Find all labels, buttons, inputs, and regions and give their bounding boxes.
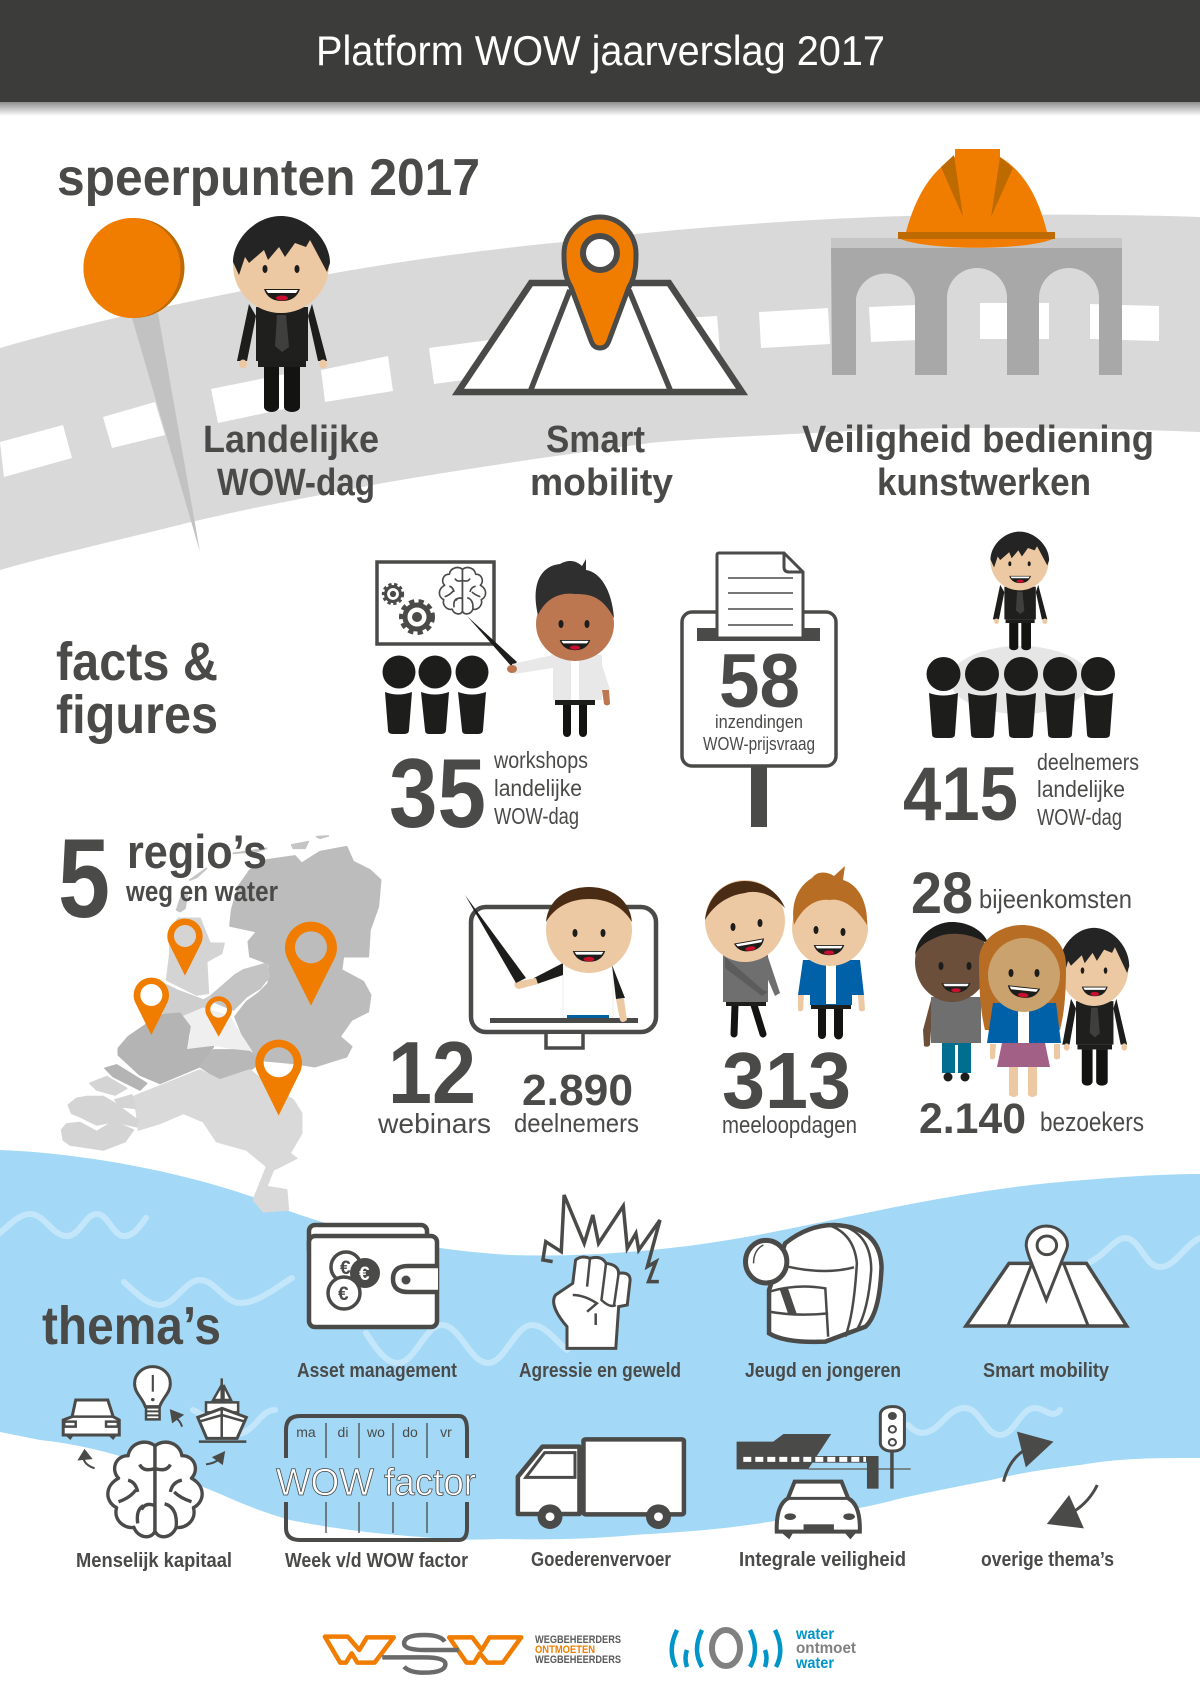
stat: 28 bijeenkomsten: bijeenkomsten — [979, 884, 1132, 914]
stat: 2.890 deelnemers: deelnemers — [514, 1108, 639, 1138]
stat: 2.890 deelnemers — [514, 1066, 639, 1138]
document — [717, 553, 803, 638]
icon: WOW factor week calendar — [276, 1416, 476, 1540]
heading: facts & figures: facts & — [56, 632, 218, 692]
presenter — [507, 559, 614, 737]
labels: bottom row themes — [76, 1549, 1114, 1572]
waves — [0, 1214, 1200, 1435]
labels: top row themes — [297, 1360, 1110, 1382]
woman in blue jacket — [979, 925, 1066, 1097]
illustration: webinar presenter in monitor — [465, 887, 656, 1048]
person in blue — [792, 866, 868, 1040]
icon: WOW factor week calendar: di — [338, 1424, 348, 1440]
label: Smart mobility: Smart — [546, 419, 645, 461]
stat: 35 workshops: 35 — [389, 738, 486, 848]
icon: WOW factor week calendar: ma — [296, 1424, 316, 1440]
illustration: two people walking along — [705, 866, 868, 1040]
stat: 5 regio's weg en water: regio’s — [127, 825, 267, 878]
stat: 5 regio's weg en water: 5 — [58, 816, 110, 941]
stat: 415 deelnemers: landelijke — [1037, 776, 1125, 802]
logo: wegbeheerders ontmoeten wegbeheerders — [325, 1634, 621, 1673]
stat: 28 bijeenkomsten: 28 — [911, 861, 973, 926]
audience — [926, 657, 1115, 738]
logo: water ontmoet water: water — [795, 1655, 834, 1672]
arrows — [79, 1411, 224, 1468]
label: Smart mobility: mobility — [530, 462, 673, 504]
stat: 2.140 bezoekers: bezoekers — [1040, 1107, 1144, 1137]
illustration: group of three visitors — [915, 922, 1129, 1097]
labels: bottom row themes: Menselijk kapitaal — [76, 1550, 232, 1572]
car — [63, 1400, 119, 1440]
stat: 35 workshops: WOW-dag — [494, 803, 579, 829]
stat: 313 meeloopdagen: 313 — [722, 1036, 851, 1125]
icon: map with orange pin — [458, 217, 742, 392]
map pins — [134, 919, 337, 1116]
stat: 28 bijeenkomsten — [911, 861, 1132, 926]
icon: wallet with euro coins: € — [338, 1284, 349, 1305]
stat: 35 workshops: workshops — [493, 747, 588, 773]
icon: wallet with euro coins: € — [359, 1264, 370, 1285]
icon: WOW factor week calendar: do — [402, 1424, 418, 1440]
labels: bottom row themes: Week v/d WOW factor — [285, 1550, 468, 1572]
label: Veiligheid bediening kunstwerken — [802, 419, 1154, 504]
stat: 35 workshops: landelijke — [494, 775, 582, 801]
icon: wallet with euro coins — [309, 1225, 438, 1327]
logo: wegbeheerders ontmoeten wegbeheerders: WEGBEHEERDERS — [535, 1634, 621, 1646]
man in suit — [1059, 928, 1129, 1086]
icon: WOW factor week calendar: vr — [440, 1424, 452, 1440]
icon: WOW factor week calendar: WOW factor — [276, 1462, 476, 1504]
title: Platform WOW jaarverslag 2017 — [316, 27, 885, 74]
label: Landelijke WOW-dag: Landelijke — [203, 419, 379, 461]
labels: top row themes: Jeugd en jongeren — [745, 1360, 901, 1382]
labels: bottom row themes: overige thema’s — [981, 1549, 1114, 1571]
illustration: speaker above audience — [926, 532, 1115, 738]
stat: 35 workshops — [389, 738, 588, 848]
water band — [0, 1150, 1200, 1540]
ship — [198, 1378, 246, 1442]
logo: water ontmoet water: water — [795, 1626, 834, 1643]
label: Veiligheid bediening kunstwerken: kunstwerken — [877, 462, 1091, 504]
logo: wegbeheerders ontmoeten wegbeheerders: ONTMOETEN — [535, 1644, 595, 1656]
icon: two curved arrows — [1004, 1432, 1097, 1528]
stat: 415 deelnemers: 415 — [903, 752, 1018, 837]
person: Landelijke WOW-dag — [233, 216, 330, 412]
header bar — [0, 0, 1200, 116]
label: Veiligheid bediening kunstwerken: Veiligheid bediening — [802, 419, 1154, 461]
stat: 5 regio's weg en water: weg en water — [125, 876, 278, 908]
labels: bottom row themes: Goederenvervoer — [531, 1549, 671, 1571]
icon: level crossing with car — [737, 1407, 911, 1539]
stat: 12 webinars: 12 — [388, 1023, 476, 1122]
logo: water ontmoet water — [672, 1626, 857, 1672]
heading: thema's: thema’s — [42, 1296, 221, 1356]
heading: facts & figures: figures — [56, 685, 218, 745]
stat: 313 meeloopdagen: meeloopdagen — [722, 1112, 857, 1139]
audience — [382, 656, 488, 734]
stat: 415 deelnemers — [903, 749, 1139, 837]
label: Landelijke WOW-dag — [203, 419, 379, 504]
stat: 2.140 bezoekers: 2.140 — [919, 1095, 1026, 1143]
illustration: workshop presenter with audience — [377, 559, 614, 737]
stat: 415 deelnemers: deelnemers — [1037, 749, 1139, 775]
sign: 58 inzendingen WOW-prijsvraag — [682, 553, 836, 827]
dark-skinned man — [915, 922, 989, 1082]
sign: 58 inzendingen WOW-prijsvraag: inzendingen — [715, 712, 803, 732]
stat: 2.890 deelnemers: 2.890 — [522, 1066, 633, 1115]
stat: 12 webinars: webinars — [377, 1108, 491, 1139]
light bulb — [135, 1367, 170, 1419]
stat: 2.140 bezoekers — [919, 1095, 1144, 1143]
label: Smart mobility — [530, 419, 673, 504]
stat: 5 regio's weg en water — [58, 816, 381, 1212]
heading: facts & figures — [56, 632, 218, 745]
icon: backpack with magnifier — [746, 1225, 882, 1342]
road band — [0, 215, 1200, 570]
person in grey — [705, 880, 785, 1034]
traffic light — [880, 1407, 904, 1451]
icon: WOW factor week calendar: wo — [366, 1424, 385, 1440]
icon: map with outline pin — [966, 1226, 1127, 1326]
sign: 58 inzendingen WOW-prijsvraag: 58 — [719, 639, 800, 724]
labels: top row themes: Smart mobility — [983, 1360, 1110, 1382]
labels: top row themes: Asset management — [297, 1360, 457, 1382]
map of the Netherlands — [62, 836, 381, 1212]
labels: top row themes: Agressie en geweld — [519, 1360, 681, 1382]
label: Landelijke WOW-dag: WOW-dag — [217, 462, 375, 504]
logo: water ontmoet water: ontmoet — [796, 1640, 857, 1657]
heading: speerpunten 2017: speerpunten 2017 — [57, 149, 480, 207]
car front — [777, 1482, 860, 1539]
sign: 58 inzendingen WOW-prijsvraag: WOW-prijsvraag — [703, 734, 815, 754]
icon: truck — [518, 1439, 684, 1529]
icon: bridge with helmet — [831, 149, 1122, 375]
stat: 415 deelnemers: WOW-dag — [1037, 804, 1122, 830]
icon: fist with burst — [543, 1195, 660, 1348]
icon: orange map pin — [84, 218, 200, 552]
icon: brain with car, bulb and ship — [63, 1367, 246, 1537]
presentation board — [377, 562, 494, 644]
logo: wegbeheerders ontmoeten wegbeheerders: WEGBEHEERDERS — [535, 1654, 621, 1666]
labels: bottom row themes: Integrale veiligheid — [739, 1549, 906, 1571]
icon: wallet with euro coins: € — [340, 1258, 351, 1279]
